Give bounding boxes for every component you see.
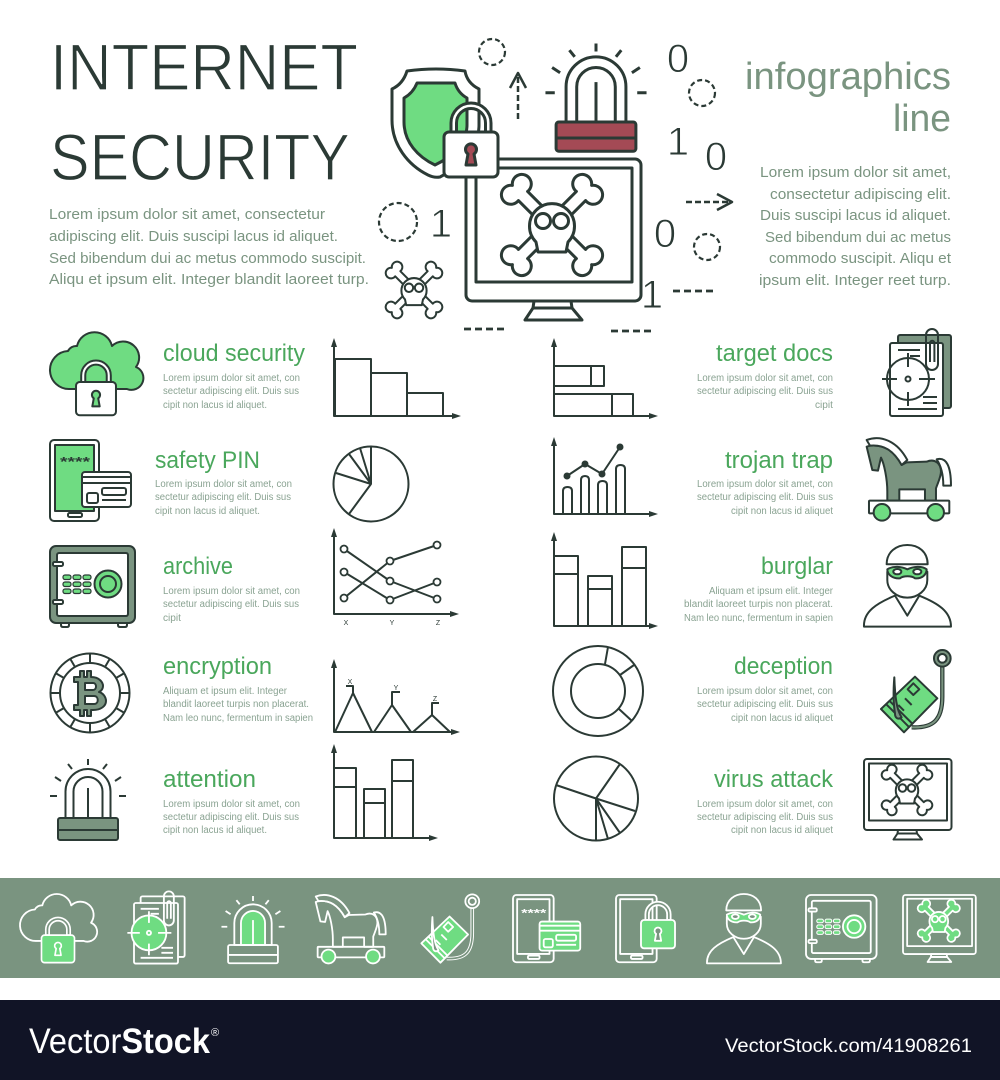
- description: [684, 586, 834, 624]
- description: sectetur adipiscing elit. Duis sus: [697, 699, 833, 710]
- description: [155, 479, 292, 517]
- arrow up: [510, 73, 526, 119]
- binary digits: 1: [430, 202, 452, 246]
- icon: infected monitor: [903, 895, 976, 962]
- heading: virus attack: [714, 766, 834, 793]
- right intro text: [759, 164, 952, 289]
- description: Lorem ipsum dolor sit amet, con: [155, 479, 292, 490]
- description: Lorem ipsum dolor sit amet, con: [163, 373, 300, 384]
- panel: attention: [50, 759, 300, 840]
- heading: target docs: [716, 340, 833, 367]
- chart: stacked bars: [551, 532, 658, 629]
- panel: virus attack: [697, 759, 952, 840]
- icon: alarm siren: [545, 44, 647, 151]
- icon: phone and card: [50, 440, 131, 521]
- heading: encryption: [163, 653, 272, 680]
- icon: cloud lock: [50, 332, 143, 415]
- icon: phone and card: [513, 895, 580, 962]
- icon: shield: [392, 69, 479, 177]
- description: [697, 373, 833, 411]
- panel: cloud security: [50, 332, 305, 415]
- heading: trojan trap: [725, 447, 833, 474]
- registered mark: ®: [211, 1027, 219, 1039]
- chart: descending bars: [331, 338, 461, 419]
- chart: pie with wedges: [334, 446, 408, 522]
- dashed circles: [379, 39, 720, 260]
- description: cipit non lacus id aliquet: [731, 713, 833, 724]
- binary digits: [430, 37, 727, 317]
- left intro text: adipiscing elit. Duis suscipi lacus id aliquet.: [49, 228, 338, 245]
- chart: pie segments: [554, 756, 638, 840]
- heading: burglar: [761, 553, 833, 580]
- left intro text: Lorem ipsum dolor sit amet, consectetur: [49, 206, 325, 223]
- description: sectetur adipiscing elit. Duis sus: [163, 812, 299, 823]
- description: Lorem ipsum dolor sit amet, con: [163, 586, 300, 597]
- chart: line plot XYZ: [331, 528, 459, 627]
- arrow right: [686, 194, 732, 210]
- description: sectetur adipiscing elit. Duis sus: [163, 599, 299, 610]
- binary digits: 0: [654, 212, 676, 256]
- strip background: [0, 878, 1000, 978]
- heading: archive: [163, 553, 233, 580]
- title: [50, 30, 358, 194]
- description: sectetur adipiscing elit. Duis sus: [697, 812, 833, 823]
- description: [697, 799, 833, 836]
- binary digits: 0: [667, 37, 689, 81]
- panel: burglar: [684, 545, 951, 627]
- icon: trojan horse: [316, 895, 386, 963]
- chart: line plot XYZ: Y: [390, 620, 395, 627]
- left intro text: Aliqu et ipsum elit. Integer blandit laoreet turp.: [49, 271, 369, 288]
- heading: deception: [734, 653, 833, 680]
- icon: phone and card: ****: [521, 908, 547, 920]
- icon: cloud lock: [20, 894, 97, 963]
- description: Lorem ipsum dolor sit amet, con: [697, 686, 833, 697]
- subtitle: [745, 56, 951, 140]
- description: Lorem ipsum dolor sit amet, con: [697, 373, 833, 384]
- icon: card on hook: [421, 894, 479, 963]
- chart: triangle peaks: Z: [433, 696, 438, 703]
- description: cipit non lacus id aliquet.: [163, 825, 267, 836]
- left intro text: [49, 206, 369, 288]
- panel: target docs: [697, 329, 951, 416]
- right intro text: commodo suscipit. Aliqu et: [769, 250, 952, 267]
- icon: safe: [50, 546, 135, 627]
- heading: attention: [163, 766, 256, 793]
- icon: burglar: [707, 894, 781, 963]
- description: Aliquam et ipsum elit. Integer: [163, 686, 288, 697]
- description: [697, 479, 833, 517]
- icon: target documents: [882, 329, 951, 416]
- description: cipit: [815, 400, 833, 411]
- description: Lorem ipsum dolor sit amet, con: [697, 479, 833, 490]
- hero illustration: [379, 39, 732, 331]
- right intro text: ipsum elit. Integer reet turp.: [759, 272, 951, 289]
- description: blandit laoreet turpis non placerat.: [163, 699, 309, 710]
- chart: stacked bars small: [331, 744, 438, 841]
- description: cipit non lacus id aliquet.: [155, 506, 260, 517]
- description: sectetur adipiscing elit. Duis sus: [163, 386, 299, 397]
- chart: triangle peaks: X: [348, 679, 353, 686]
- description: cipit non lacus id aliquet: [731, 506, 833, 517]
- description: [163, 586, 300, 624]
- chart: donut: [553, 646, 643, 736]
- description: sectetur adipiscing elit. Duis sus: [155, 492, 291, 503]
- description: cipit non lacus id aliquet.: [163, 400, 267, 411]
- panel: trojan trap: [697, 438, 951, 521]
- chart: triangle peaks: [331, 659, 460, 735]
- subtitle: line: [893, 98, 951, 140]
- icon: small skull: [383, 259, 445, 321]
- panel: icon strip: [0, 878, 1000, 978]
- description: [697, 686, 833, 724]
- right intro text: Sed bibendum dui ac metus: [765, 229, 951, 246]
- description: Lorem ipsum dolor sit amet, con: [163, 799, 300, 810]
- description: sectetur adipiscing elit. Duis sus: [697, 492, 833, 503]
- footer image id: VectorStock.com/41908261: [725, 1036, 972, 1057]
- description: cipit non lacus id aliquet: [731, 825, 833, 836]
- icon: trojan horse: [867, 438, 951, 521]
- chart: line plot XYZ: Z: [436, 620, 441, 627]
- description: cipit: [163, 613, 181, 624]
- icon: siren: [50, 759, 126, 840]
- description: blandit laoreet turpis non placerat.: [684, 599, 833, 610]
- description: Aliquam et ipsum elit. Integer: [709, 586, 834, 597]
- chart: bars with line: [551, 437, 658, 517]
- heading: safety PIN: [155, 447, 260, 474]
- chart: triangle peaks: Y: [394, 685, 399, 692]
- footer band: [0, 1000, 1000, 1080]
- left intro text: Sed bibendum dui ac metus commodo suscipit.: [49, 250, 366, 267]
- icon: siren: [221, 896, 285, 963]
- description: [163, 686, 313, 724]
- icon: card on hook: [881, 650, 951, 732]
- icon: phone lock: [616, 895, 675, 962]
- description: Nam leo nunc, fermentum in sapien: [163, 713, 313, 724]
- icon: burglar: [864, 545, 951, 627]
- dashes: [464, 291, 714, 331]
- icon: safe: [806, 895, 877, 962]
- chart: line plot XYZ: X: [344, 620, 349, 627]
- icon: padlock: [444, 103, 498, 177]
- description: Lorem ipsum dolor sit amet, con: [697, 799, 833, 810]
- subtitle: infographics: [745, 56, 951, 98]
- right intro text: Lorem ipsum dolor sit amet,: [760, 164, 951, 181]
- icon: target documents: [127, 891, 185, 964]
- description: [163, 373, 300, 411]
- right intro text: consectetur adipiscing elit.: [770, 186, 951, 203]
- title: SECURITY: [50, 120, 350, 194]
- binary digits: 0: [705, 135, 727, 179]
- panel: archive: [50, 546, 300, 627]
- binary digits: 1: [667, 120, 689, 164]
- binary digits: 1: [641, 273, 663, 317]
- description: Nam leo nunc, fermentum in sapien: [684, 613, 833, 624]
- panel: deception: [697, 650, 951, 732]
- description: sectetur adipiscing elit. Duis sus: [697, 386, 833, 397]
- panel: encryption: [50, 653, 313, 732]
- icon: phone and card: ****: [60, 454, 91, 469]
- panel: safety PIN: [50, 440, 292, 521]
- heading: cloud security: [163, 340, 305, 367]
- description: [163, 799, 300, 836]
- icon: bitcoin coin: [50, 654, 130, 732]
- chart: horizontal bars: [551, 338, 658, 419]
- icon: infected monitor: [864, 759, 952, 840]
- right intro text: Duis suscipi lacus id aliquet.: [760, 207, 951, 224]
- footer logo: VectorStock: [29, 1022, 210, 1061]
- icon: monitor with skull: [466, 159, 641, 320]
- title: INTERNET: [50, 30, 358, 104]
